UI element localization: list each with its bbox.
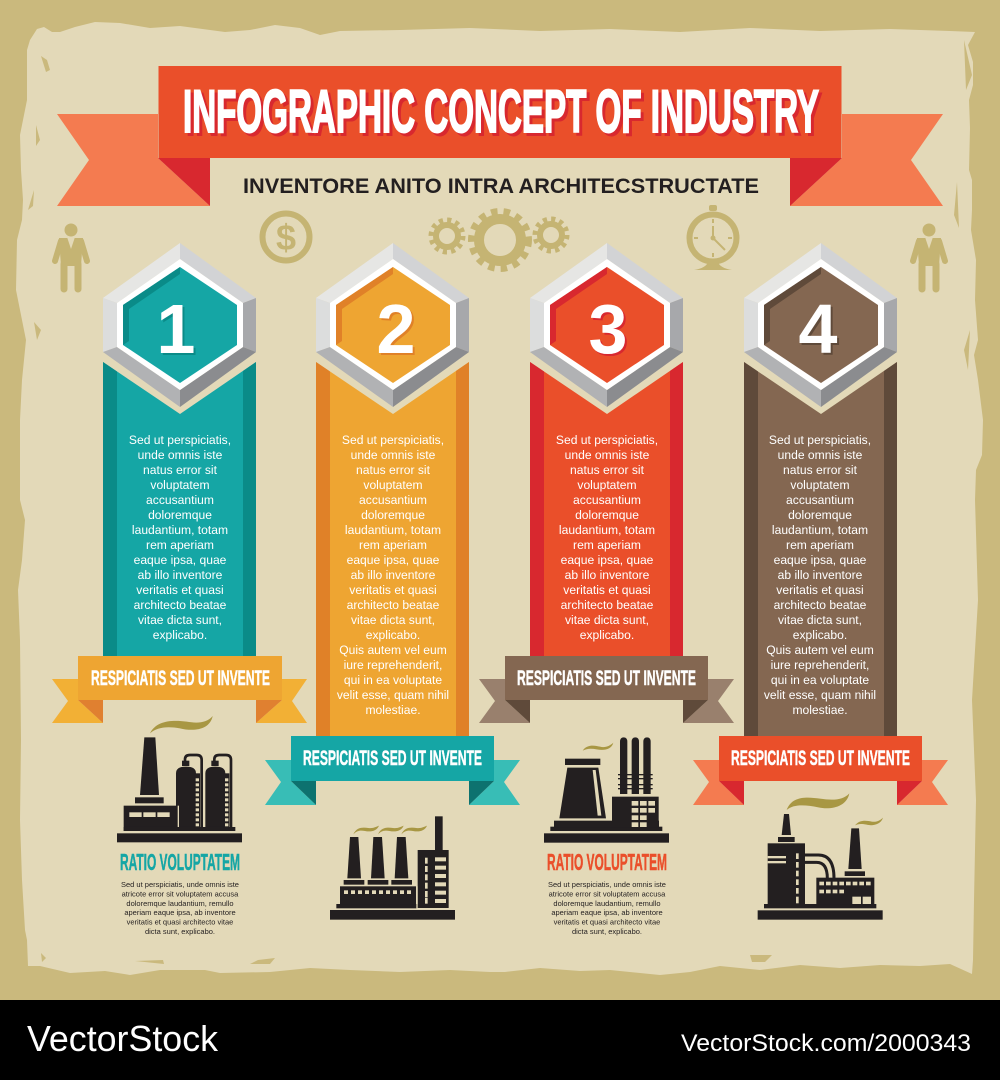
column 3 text: accusantium	[573, 493, 641, 507]
column 1 text: ab illo inventore	[138, 568, 223, 582]
column 4 text: eaque ipsa, quae	[774, 553, 867, 567]
column 2 text: rem aperiam	[359, 538, 427, 552]
column 1 text: accusantium	[146, 493, 214, 507]
column 1 body	[103, 362, 256, 660]
caption 1 text: dicta sunt, explicabo.	[145, 927, 215, 936]
hexagon badge 1	[103, 243, 256, 407]
column 1 text: rem aperiam	[146, 538, 214, 552]
column 3 text: natus error sit	[570, 463, 645, 477]
column 3 text: eaque ipsa, quae	[561, 553, 654, 567]
column 3 text: explicabo.	[580, 628, 634, 642]
column 2	[265, 243, 520, 920]
caption 3 text: Sed ut perspiciatis, unde omnis iste	[548, 880, 666, 889]
column 2 text: accusantium	[359, 493, 427, 507]
column 3 text: laudantium, totam	[559, 523, 655, 537]
icon: gears	[431, 212, 567, 268]
watermark bar	[0, 1000, 1000, 1080]
column 4 text: laudantium, totam	[772, 523, 868, 537]
column 2 text: Sed ut perspiciatis,	[342, 433, 444, 447]
column 3 body	[530, 362, 683, 660]
column 4 text: explicabo.	[793, 628, 847, 642]
column 2 text: Quis autem vel eum	[339, 643, 447, 657]
column 1 text: laudantium, totam	[132, 523, 228, 537]
column 1 text: Sed ut perspiciatis,	[129, 433, 231, 447]
column 1 text: architecto beatae	[134, 598, 227, 612]
column 4 text: vitae dicta sunt,	[778, 613, 862, 627]
column 1 text: veritatis et quasi	[136, 583, 224, 597]
hexagon badge 4	[744, 243, 897, 407]
subtitle: INVENTORE ANITO INTRA ARCHITECSTRUCTATE	[243, 175, 759, 198]
column 2 text: vitae dicta sunt,	[351, 613, 435, 627]
icon: dollar coin: $	[276, 217, 296, 258]
hexagon badge 2: 2	[377, 290, 415, 368]
caption 1 text: atricote error sit voluptatem accusa	[122, 889, 239, 898]
column 2 text: natus error sit	[356, 463, 431, 477]
caption 1 text: aperiam eaque ipsa, ab inventore	[124, 908, 236, 917]
ribbon 4	[693, 736, 948, 805]
hexagon badge 3: 3	[589, 290, 627, 368]
column 4 text: iure reprehenderit,	[771, 658, 869, 672]
column 4 text: architecto beatae	[774, 598, 867, 612]
column 1 text: vitae dicta sunt,	[138, 613, 222, 627]
column 2 text: velit esse, quam nihil	[337, 688, 449, 702]
column 3 text: ab illo inventore	[565, 568, 650, 582]
ribbon 2: RESPICIATIS SED UT INVENTE	[303, 746, 482, 770]
column 2 text: doloremque	[361, 508, 425, 522]
column 3 text: architecto beatae	[561, 598, 654, 612]
caption 3 text: doloremque laudantium, remullo	[553, 899, 661, 908]
column 2 text: iure reprehenderit,	[344, 658, 442, 672]
caption 3 text: veritatis et quasi architecto vitae	[554, 918, 660, 927]
column 4 text: qui in ea voluptate	[771, 673, 869, 687]
column 2 text: qui in ea voluptate	[344, 673, 442, 687]
column 3 text: voluptatem	[577, 478, 637, 492]
column 4 text: Quis autem vel eum	[766, 643, 874, 657]
column 2 text: laudantium, totam	[345, 523, 441, 537]
factory icon 2	[330, 816, 455, 920]
column 3 text: doloremque	[575, 508, 639, 522]
ribbon 1	[52, 656, 307, 723]
column 2 text: voluptatem	[363, 478, 423, 492]
column 1 text: voluptatem	[150, 478, 210, 492]
column 4 text: accusantium	[786, 493, 854, 507]
hexagon badge 3	[530, 243, 683, 407]
column 2 text: eaque ipsa, quae	[347, 553, 440, 567]
column 3 text: rem aperiam	[573, 538, 641, 552]
column 2 text: unde omnis iste	[351, 448, 436, 462]
column 3 text: Sed ut perspiciatis,	[556, 433, 658, 447]
icon: dollar coin	[262, 214, 310, 260]
caption 3 text: atricote error sit voluptatem accusa	[549, 889, 666, 898]
column 1 text: eaque ipsa, quae	[134, 553, 227, 567]
caption 3 text: dicta sunt, explicabo.	[572, 927, 642, 936]
column 2 body	[316, 362, 469, 740]
column 4 text: veritatis et quasi	[776, 583, 864, 597]
hexagon badge 4: 4	[801, 292, 840, 370]
column 4 text: doloremque	[788, 508, 852, 522]
caption 3 heading: RATIO VOLUPTATEM	[547, 849, 667, 875]
factory icon 4	[758, 793, 883, 920]
column 4 body	[744, 362, 897, 740]
column 4	[693, 243, 948, 920]
column 2 text: ab illo inventore	[351, 568, 436, 582]
column 2 text: molestiae.	[365, 703, 421, 717]
column 4 text: unde omnis iste	[778, 448, 863, 462]
column 2 text: explicabo.	[366, 628, 420, 642]
caption 1 heading: RATIO VOLUPTATEM	[120, 849, 240, 875]
caption 1 text: doloremque laudantium, remullo	[126, 899, 234, 908]
column 4 text: natus error sit	[783, 463, 858, 477]
column 3 text: unde omnis iste	[565, 448, 650, 462]
column 1 text: natus error sit	[143, 463, 218, 477]
icon: clock	[690, 205, 736, 270]
column 4 text: velit esse, quam nihil	[764, 688, 876, 702]
column 4 text: ab illo inventore	[778, 568, 863, 582]
column 3	[479, 243, 734, 936]
column 3 text: vitae dicta sunt,	[565, 613, 649, 627]
column 4 text: molestiae.	[792, 703, 848, 717]
ribbon 3	[479, 656, 734, 723]
column 4 text: rem aperiam	[786, 538, 854, 552]
factory icon 1	[117, 716, 242, 842]
hexagon badge 1: 1	[159, 292, 197, 370]
column 1 text: explicabo.	[153, 628, 207, 642]
column 2 text: veritatis et quasi	[349, 583, 437, 597]
ribbon 2	[265, 736, 520, 805]
hexagon badge 1: 1	[157, 290, 195, 368]
watermark url: VectorStock.com/2000343	[681, 1030, 971, 1057]
hexagon badge 2	[316, 243, 469, 407]
column 3 text: veritatis et quasi	[563, 583, 651, 597]
factory icon 3	[544, 737, 669, 843]
column 4 text: voluptatem	[790, 478, 850, 492]
title ribbon	[57, 66, 943, 206]
hexagon badge 4: 4	[799, 290, 838, 368]
ribbon 1: RESPICIATIS SED UT INVENTE	[91, 666, 270, 690]
column 1 text: doloremque	[148, 508, 212, 522]
caption 1 text: veritatis et quasi architecto vitae	[127, 918, 233, 927]
ribbon 3: RESPICIATIS SED UT INVENTE	[517, 666, 696, 690]
column 1	[52, 243, 307, 936]
watermark logo: VectorStock	[27, 1018, 219, 1059]
icon: person right	[913, 224, 945, 289]
column 4 text: Sed ut perspiciatis,	[769, 433, 871, 447]
caption 3 text: aperiam eaque ipsa, ab inventore	[551, 908, 663, 917]
caption 1 text: Sed ut perspiciatis, unde omnis iste	[121, 880, 239, 889]
column 1 text: unde omnis iste	[138, 448, 223, 462]
icon: person left	[55, 224, 87, 289]
hexagon badge 2: 2	[379, 292, 417, 370]
hexagon badge 3: 3	[591, 292, 629, 370]
column 2 text: architecto beatae	[347, 598, 440, 612]
